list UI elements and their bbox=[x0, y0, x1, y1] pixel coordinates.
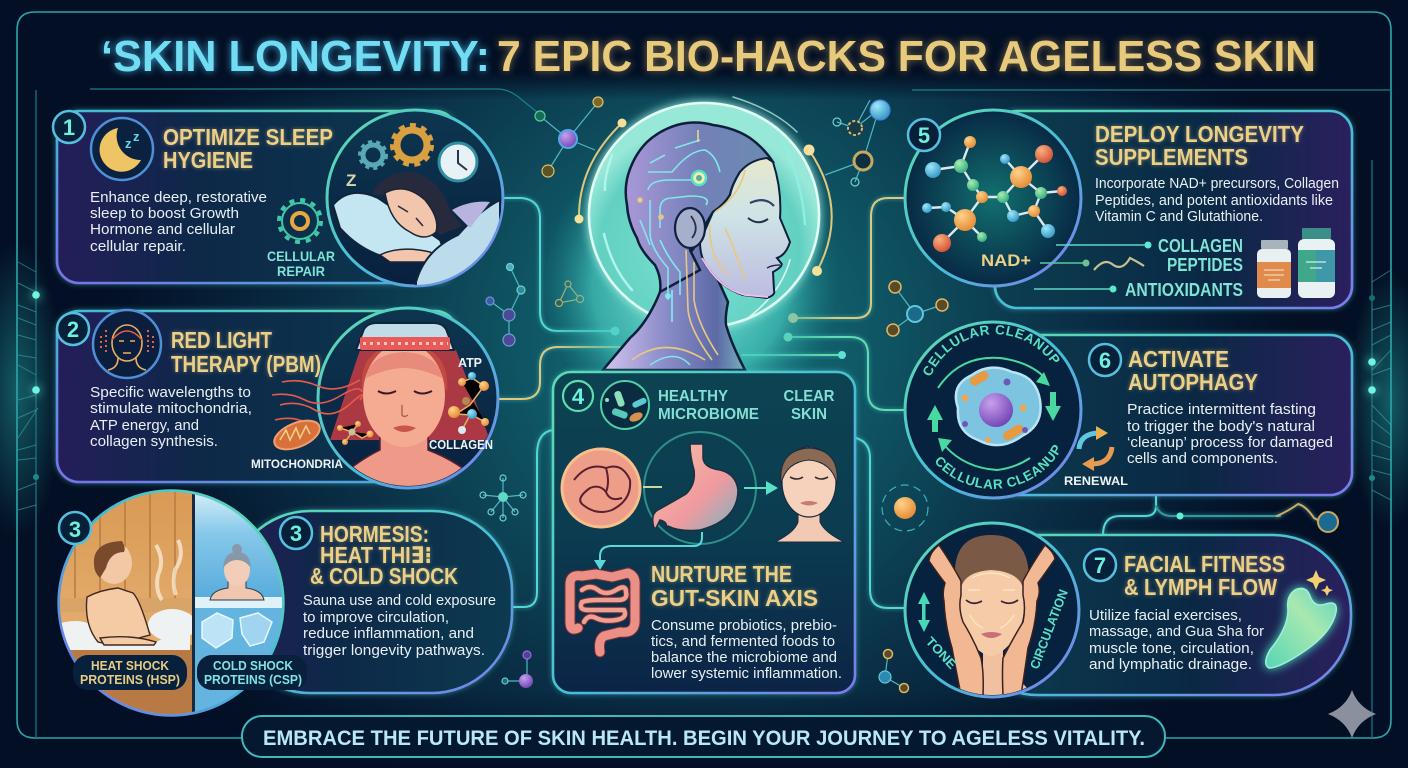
body text: Vitamin C and Glutathione. bbox=[1095, 208, 1263, 225]
body text: Incorporate NAD+ precursors, Collagen bbox=[1095, 175, 1339, 192]
scene: red light face: ATP bbox=[458, 355, 482, 370]
badge 2: 2 bbox=[67, 317, 79, 342]
scene: sauna and ice bath bbox=[50, 490, 284, 720]
heading: HYGIENE bbox=[163, 147, 253, 173]
connector lines bbox=[496, 198, 1328, 608]
heading: OPTIMIZE SLEEP bbox=[163, 124, 333, 150]
badge 3 on circle: 3 bbox=[69, 517, 81, 542]
body text: muscle tone, circulation, bbox=[1089, 640, 1254, 657]
heading: ACTIVATE bbox=[1128, 346, 1229, 372]
badge 3 bbox=[280, 517, 312, 549]
labels: collagen peptides, antioxidants: PEPTIDES bbox=[1167, 255, 1243, 275]
body text: ATP energy, and bbox=[90, 417, 199, 434]
body text: Sauna use and cold exposure bbox=[303, 592, 496, 609]
body text: balance the microbiome and bbox=[651, 649, 837, 666]
label: cellular repair bbox=[267, 248, 335, 279]
panel 4: gut-skin axis bbox=[553, 372, 855, 693]
pill: heat shock proteins bbox=[73, 655, 187, 690]
badge 3 on circle bbox=[59, 512, 91, 544]
body text: trigger longevity pathways. bbox=[303, 642, 485, 659]
badge 7: 7 bbox=[1094, 553, 1106, 578]
icon: sparkles bbox=[1306, 570, 1333, 596]
body text: Hormone and cellular bbox=[90, 221, 235, 238]
heading: GUT-SKIN AXIS bbox=[651, 585, 818, 611]
heading bbox=[1124, 551, 1285, 600]
icon: mitochondrion bbox=[270, 415, 324, 455]
badge 3: 3 bbox=[290, 521, 302, 546]
leader lines bbox=[1034, 242, 1152, 292]
heading: AUTOPHAGY bbox=[1128, 369, 1258, 395]
curved labels bbox=[924, 325, 1060, 489]
labels: collagen peptides, antioxidants: ANTIOXIDANTS bbox=[1125, 280, 1243, 300]
pill: cold shock proteins bbox=[197, 655, 307, 690]
curved labels: tone and circulation: TONE bbox=[923, 634, 960, 672]
badge 1 bbox=[53, 111, 85, 143]
labels: collagen peptides, antioxidants: COLLAGEN bbox=[1158, 236, 1243, 256]
heading: HEAT THI∃⁝ bbox=[320, 542, 432, 568]
body text: reduce inflammation, and bbox=[303, 625, 474, 642]
heading: THERAPY (PBM) bbox=[171, 351, 321, 377]
body text bbox=[90, 189, 267, 255]
pill: heat shock proteins: PROTEINS (HSP) bbox=[80, 672, 180, 687]
body text: to improve circulation, bbox=[303, 609, 449, 626]
title bbox=[101, 32, 1316, 81]
illustration: intestines bbox=[570, 573, 635, 652]
arrow: tone bbox=[918, 592, 930, 632]
badge 5: 5 bbox=[918, 123, 930, 148]
scene: sleeping woman bbox=[327, 110, 503, 290]
heading bbox=[651, 561, 818, 611]
body text bbox=[1089, 607, 1264, 673]
illustration: gut tissue bbox=[562, 449, 640, 527]
body text: Practice intermittent fasting bbox=[1127, 401, 1316, 418]
scene: cell cleanup bbox=[904, 320, 1082, 500]
icon: renewal arrows bbox=[1079, 426, 1112, 471]
heading: & COLD SHOCK bbox=[310, 563, 458, 589]
body text: massage, and Gua Sha for bbox=[1089, 623, 1264, 640]
curved labels: CELLULAR CLEANUP bbox=[936, 444, 1059, 489]
heading: DEPLOY LONGEVITY bbox=[1095, 121, 1304, 147]
body text: lower systemic inflammation. bbox=[651, 665, 842, 682]
label: healthy microbiome: MICROBIOME bbox=[658, 406, 759, 423]
badge 6 bbox=[1089, 344, 1121, 376]
badge 1: 1 bbox=[63, 115, 75, 140]
heading: FACIAL FITNESS bbox=[1124, 551, 1285, 577]
pill: cold shock proteins: COLD SHOCK bbox=[213, 658, 294, 673]
icon: red waves bbox=[272, 380, 362, 425]
badge 7 bbox=[1084, 549, 1116, 581]
label: mitochondria: MITOCHONDRIA bbox=[251, 457, 343, 471]
title: 7 EPIC BIO-HACKS FOR AGELESS SKIN bbox=[497, 32, 1316, 81]
neck and shoulders bbox=[603, 240, 745, 370]
panel 5: longevity supplements bbox=[905, 110, 1352, 308]
panel 7: facial fitness bbox=[905, 523, 1351, 700]
heading bbox=[310, 521, 458, 589]
body text: cellular repair. bbox=[90, 238, 186, 255]
body text bbox=[651, 617, 842, 682]
icon: moon bbox=[91, 118, 153, 180]
footer banner: EMBRACE THE FUTURE OF SKIN HEALTH. BEGIN YOUR JOURNEY TO AGELESS VITALITY. bbox=[263, 727, 1145, 750]
pill: heat shock proteins: HEAT SHOCK bbox=[91, 658, 170, 673]
body text: Consume probiotics, prebio- bbox=[651, 617, 837, 634]
body text bbox=[90, 384, 252, 450]
label: healthy microbiome bbox=[658, 388, 759, 423]
heading bbox=[163, 124, 333, 173]
heading bbox=[1128, 346, 1258, 395]
arrow to face bbox=[744, 481, 778, 495]
label: cellular repair: CELLULAR bbox=[267, 248, 335, 264]
curved labels: CELLULAR CLEANUP bbox=[924, 325, 1060, 376]
panel 6: activate autophagy bbox=[904, 320, 1357, 500]
heading bbox=[171, 327, 321, 377]
heading bbox=[1095, 121, 1304, 170]
icon: four-point star bbox=[1328, 690, 1376, 738]
title: ‘SKIN LONGEVITY: bbox=[101, 32, 490, 81]
icon: supplement bottles bbox=[1257, 228, 1335, 298]
body text: ‘cleanup’ process for damaged bbox=[1127, 434, 1333, 451]
icon: microbiome bbox=[601, 381, 649, 429]
icon: glowing face bbox=[93, 310, 161, 378]
heading: HORMESIS: bbox=[320, 521, 429, 547]
label: cellular repair: REPAIR bbox=[277, 263, 325, 279]
badge 5 bbox=[908, 119, 940, 151]
label: NAD+: NAD+ bbox=[981, 251, 1031, 270]
panel 3: hormesis bbox=[50, 490, 512, 720]
heading: RED LIGHT bbox=[171, 327, 272, 353]
body text bbox=[1095, 175, 1339, 225]
illustration: stomach bbox=[643, 432, 756, 544]
body text: to trigger the body's natural bbox=[1127, 418, 1315, 435]
scene: red light face bbox=[318, 308, 498, 490]
icon: cellular repair gear bbox=[279, 200, 321, 242]
badge 2 bbox=[57, 313, 89, 345]
arrows around cell bbox=[935, 358, 1053, 470]
heading: & LYMPH FLOW bbox=[1124, 574, 1277, 600]
body text bbox=[303, 592, 496, 659]
arrow to intestine bbox=[594, 532, 702, 570]
panel 2: red light therapy bbox=[57, 308, 498, 490]
labelled molecules bbox=[337, 372, 489, 445]
icon: moon: z bbox=[133, 129, 140, 144]
skull with circuits bbox=[626, 122, 773, 292]
body text: Specific wavelengths to bbox=[90, 384, 251, 401]
face bbox=[700, 158, 790, 298]
scene: red light face: COLLAGEN bbox=[429, 438, 493, 452]
footer banner bbox=[242, 716, 1165, 757]
icon: moon: z bbox=[125, 136, 132, 151]
body text: Utilize facial exercises, bbox=[1089, 607, 1242, 624]
body text: Peptides, and potent antioxidants like bbox=[1095, 192, 1333, 209]
pill: cold shock proteins: PROTEINS (CSP) bbox=[204, 672, 302, 687]
body text: cells and components. bbox=[1127, 450, 1278, 467]
curved labels: tone and circulation bbox=[923, 587, 1071, 672]
body text: Enhance deep, restorative bbox=[90, 189, 267, 206]
body text: and lymphatic drainage. bbox=[1089, 656, 1252, 673]
label: clear skin bbox=[784, 388, 835, 423]
central head illustration bbox=[545, 97, 845, 435]
scene: NAD+ molecule bbox=[905, 110, 1081, 286]
badge 4: 4 bbox=[572, 384, 585, 409]
heading: SUPPLEMENTS bbox=[1095, 144, 1248, 170]
label: clear skin: SKIN bbox=[791, 406, 827, 423]
curved labels: tone and circulation: CIRCULATION bbox=[1027, 587, 1071, 671]
body text: tics, and fermented foods to bbox=[651, 633, 835, 650]
body text: stimulate mitochondria, bbox=[90, 400, 252, 417]
label: renewal: RENEWAL bbox=[1064, 474, 1128, 488]
body text bbox=[1127, 401, 1333, 467]
icon: gua sha bbox=[1266, 588, 1336, 668]
body text: sleep to boost Growth bbox=[90, 205, 239, 222]
labels: collagen peptides, antioxidants bbox=[1125, 236, 1243, 300]
scene: sleeping woman: Z bbox=[346, 171, 356, 190]
panel 1: optimize sleep hygiene bbox=[53, 110, 503, 290]
label: clear skin: CLEAR bbox=[784, 388, 835, 405]
illustration: clear-skin face bbox=[775, 447, 844, 542]
label: healthy microbiome: HEALTHY bbox=[658, 388, 728, 405]
badge 6: 6 bbox=[1099, 348, 1111, 373]
scene: facial massage bbox=[905, 523, 1079, 700]
badge 4 bbox=[563, 381, 593, 411]
heading: NURTURE THE bbox=[651, 561, 792, 587]
molecule networks bbox=[480, 97, 1338, 692]
body text: collagen synthesis. bbox=[90, 433, 218, 450]
